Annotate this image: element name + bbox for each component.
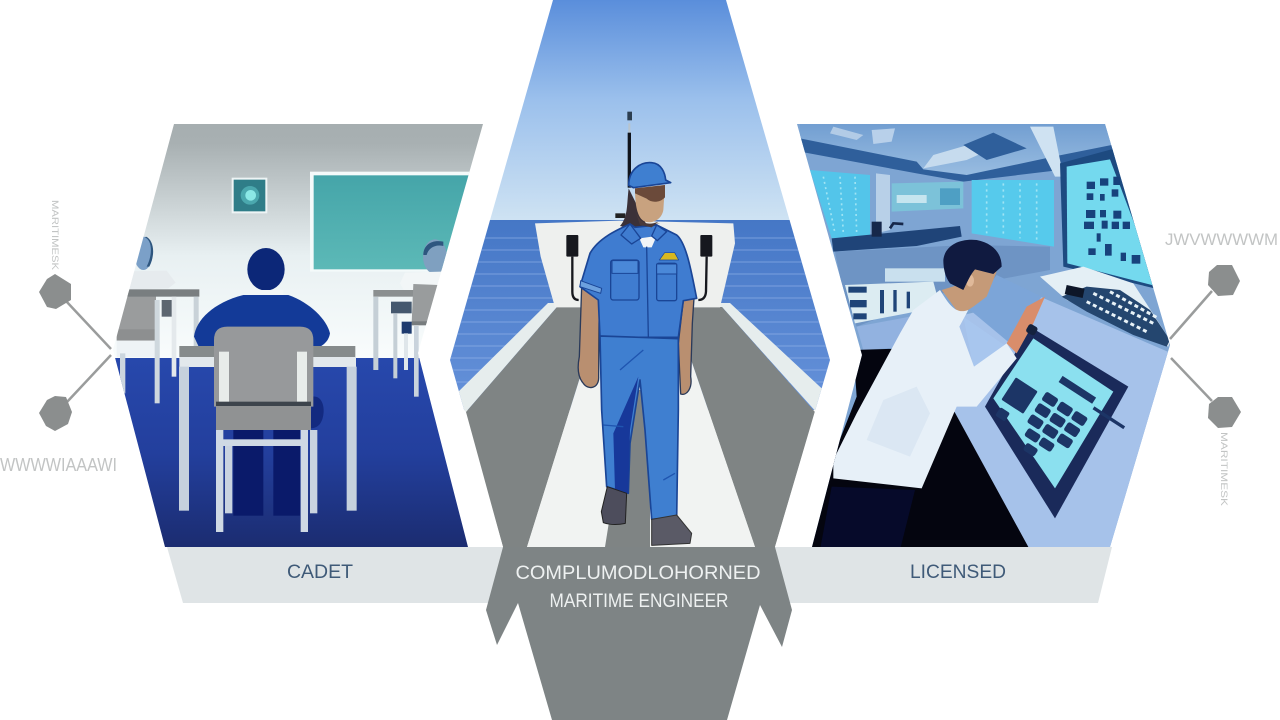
antenna mast [615, 112, 632, 218]
operator console [952, 297, 1172, 550]
deck centre grey strip [605, 390, 650, 547]
console equipment [1040, 267, 1170, 347]
label: centre title: MARITIME ENGINEER [550, 591, 728, 612]
label: licensed: LICENSED [910, 562, 1006, 583]
control tablet [985, 327, 1130, 518]
caption: left lower: WWWWIAAAWI [0, 455, 117, 475]
left student desk group [110, 237, 199, 403]
black floor [810, 348, 1033, 550]
ceiling [800, 124, 1118, 182]
banner: completed engineer ribbon [486, 547, 792, 720]
deck white walkway [527, 352, 755, 547]
right student desk group [373, 239, 447, 397]
sky [490, 0, 790, 222]
wall clock [232, 178, 267, 213]
left radio unit [566, 235, 579, 300]
connector: right nodes [1170, 265, 1241, 428]
deck left grey section [466, 307, 580, 547]
sea wave stripes [440, 238, 840, 382]
cadet seated at desk seen from behind [179, 248, 357, 532]
far desk [832, 222, 962, 252]
panel: cadet classroom [110, 124, 490, 548]
blackboard [310, 172, 474, 272]
console neck panel [973, 275, 1042, 342]
right wall screen [972, 180, 1054, 247]
classroom scene [110, 172, 474, 532]
node: lower right [1208, 397, 1241, 428]
engineer figure [578, 163, 697, 545]
label: centre title: COMPLUMODLOHORNED [516, 563, 760, 584]
back counter and keypads [835, 245, 1050, 350]
classroom wall [115, 124, 483, 346]
large monitor [1060, 148, 1162, 290]
caption: right upper: JWVWWWWM [1165, 230, 1278, 249]
classroom floor [110, 358, 490, 548]
band: licensed label strip [770, 547, 1112, 603]
caption: right vertical: MARITIMESK [1219, 432, 1229, 506]
node: upper left [39, 274, 71, 309]
caption: left vertical: MARITIMESK [50, 200, 60, 270]
deck edge rails [452, 303, 832, 414]
label: cadet: CADET [287, 562, 353, 583]
node: lower left [39, 396, 72, 431]
licensed engineer figure [820, 240, 1045, 550]
band: cadet label strip [167, 547, 510, 603]
right radio unit [698, 235, 712, 300]
control room scene [800, 120, 1172, 550]
connector: left nodes [39, 274, 111, 431]
deck right grey section [692, 307, 815, 547]
sea [440, 220, 840, 410]
ship and engineer scene [535, 112, 735, 545]
ship superstructure [535, 221, 735, 307]
panel: licensed engineer control room [790, 120, 1180, 550]
centre wall screen [876, 173, 963, 233]
control room wall [790, 120, 1180, 550]
panel: engineer on ship deck [440, 0, 840, 547]
left wall screen [810, 170, 870, 238]
label: centre title [516, 563, 760, 612]
node: upper right [1208, 265, 1240, 296]
